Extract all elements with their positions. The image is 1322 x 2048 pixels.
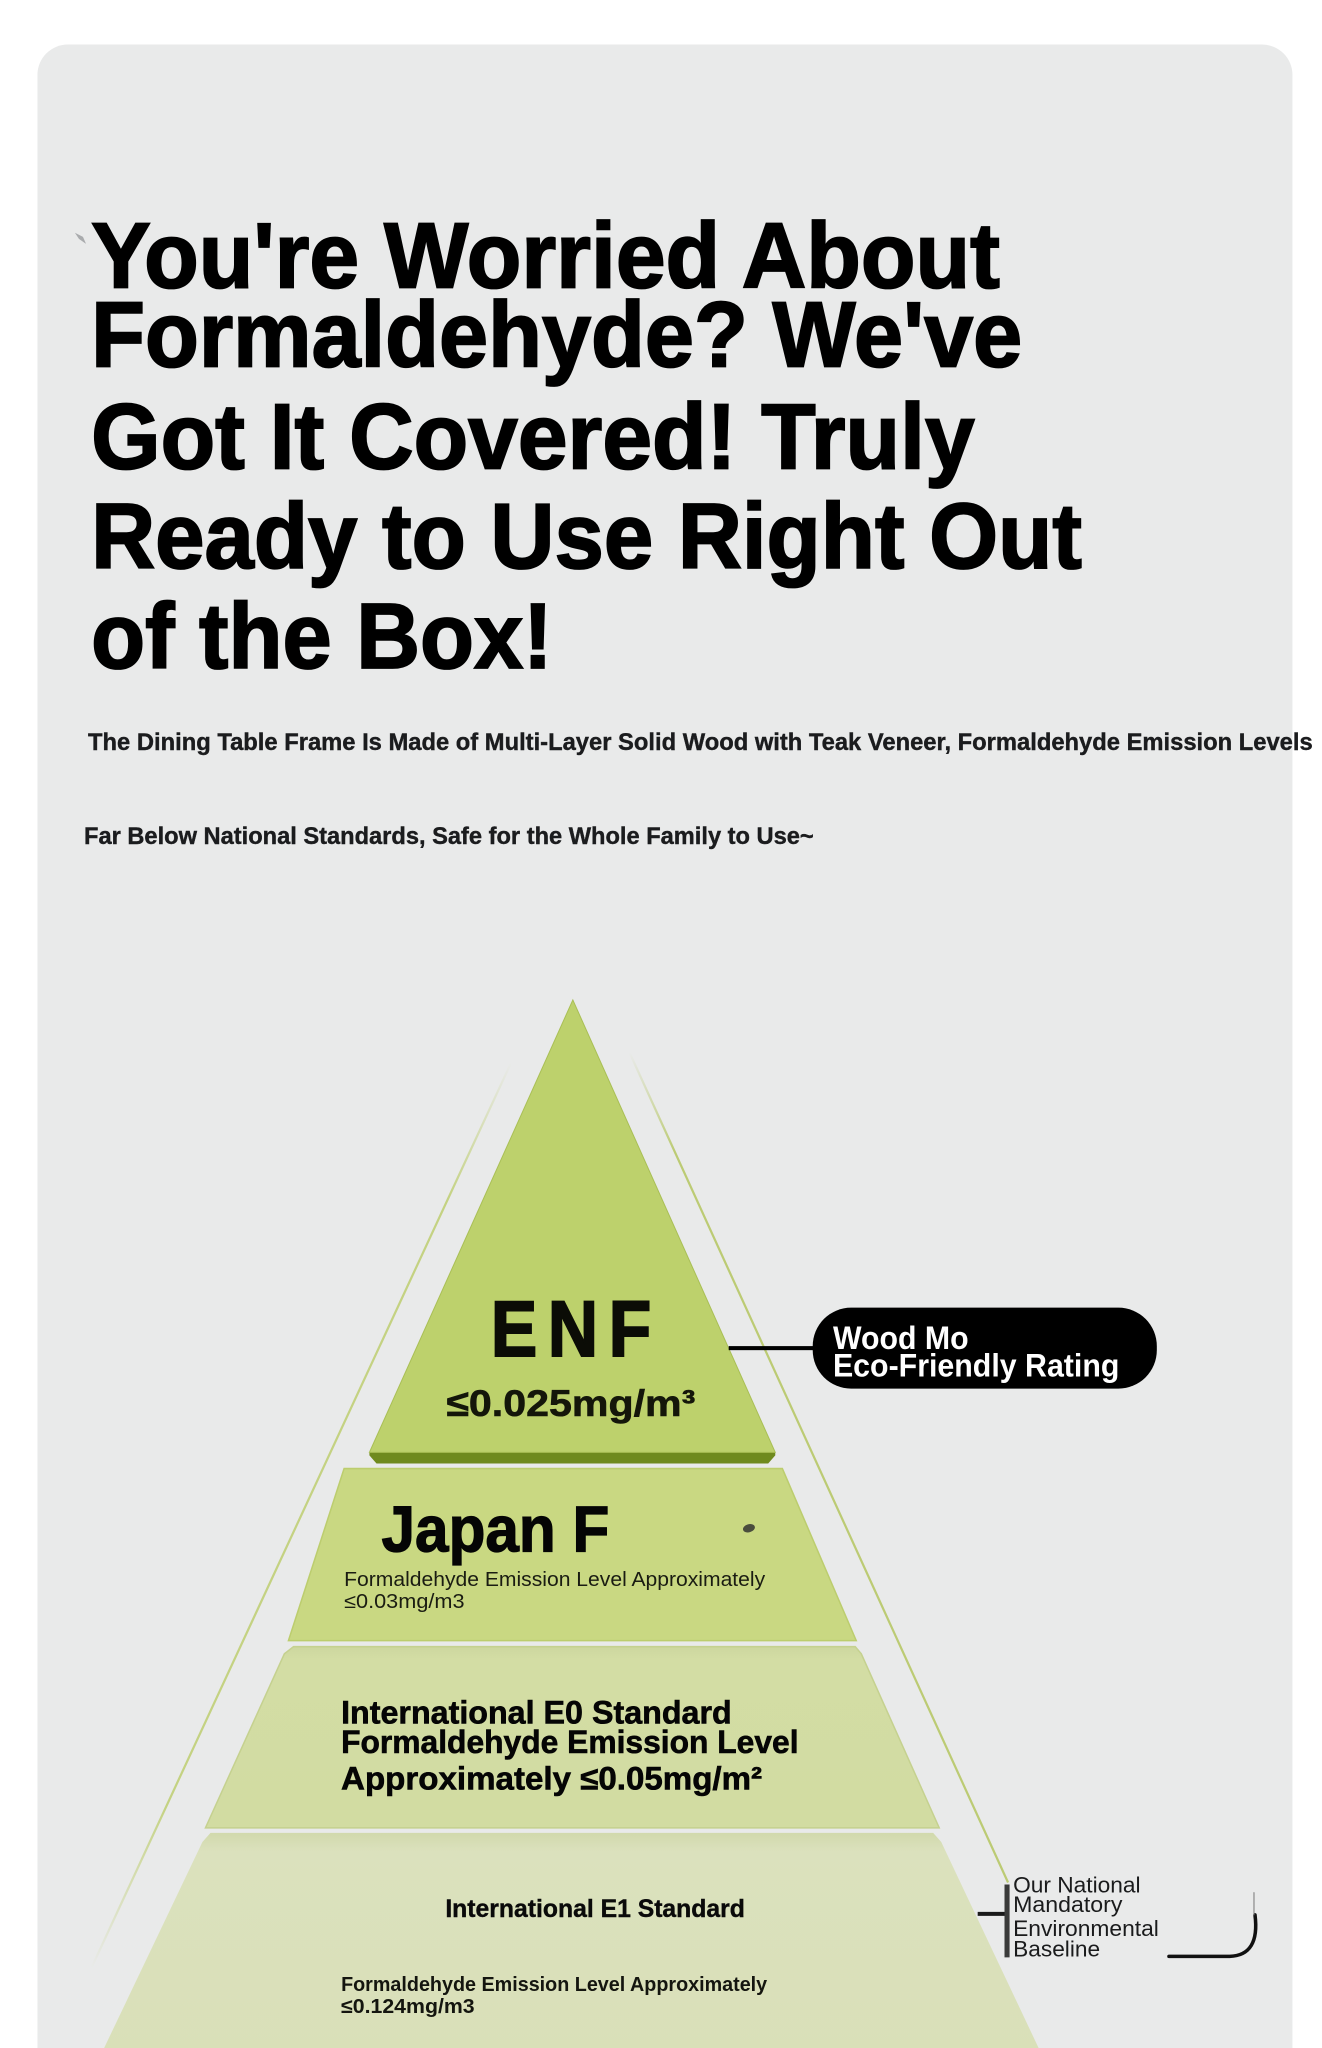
E1 detail (341, 1974, 768, 2018)
Japan F detail: ≤0.03mg/m3 (344, 1591, 465, 1613)
pyramid tier: ENF (369, 1000, 775, 1464)
title: You're Worried About (91, 203, 1000, 307)
callout text: national baseline: Our National (1013, 1873, 1141, 1898)
pyramid tier: Japan F (288, 1469, 856, 1641)
E0 text: International E0 Standard (341, 1695, 732, 1731)
E0 text: Approximately ≤0.05mg/m² (341, 1760, 762, 1796)
ENF value: ≤0.025mg/m³ (446, 1382, 695, 1424)
outer pyramid outline (91, 1053, 1008, 1969)
decorative hook curve (1169, 1893, 1256, 1956)
title: Got It Covered! Truly (91, 385, 975, 489)
connector: ENF to rating pill (729, 1346, 815, 1350)
callout text: national baseline: Baseline (1013, 1936, 1100, 1961)
subtitle text (84, 729, 1313, 850)
title: Ready to Use Right Out (91, 484, 1082, 588)
E1 heading: International E1 Standard (445, 1895, 745, 1923)
subtitle text: Far Below National Standards, Safe for the Whole Family to Use~ (84, 823, 814, 850)
callout text: national baseline (1013, 1873, 1159, 1961)
icon: small dark speck (742, 1523, 756, 1534)
E0 text: Formaldehyde Emission Level (341, 1724, 799, 1760)
E1 detail: ≤0.124mg/m3 (341, 1996, 475, 2018)
pyramid tier: International E0 (205, 1647, 939, 1828)
callout: national baseline bracket (978, 1885, 1007, 1957)
ENF label: ENF (491, 1285, 651, 1373)
title: of the Box! (91, 584, 553, 688)
callout: Wood Mo rating pill: Eco-Friendly Rating (833, 1347, 1119, 1383)
icon: small stray mark (75, 233, 86, 244)
title (91, 203, 1082, 688)
Japan F heading: Japan F (382, 1493, 609, 1566)
title: Formaldehyde? We've (91, 282, 1022, 386)
callout text: national baseline: Environmental (1013, 1916, 1159, 1941)
subtitle text: The Dining Table Frame Is Made of Multi-Layer Solid Wood with Teak Veneer, Formaldehyde Emission Levels (88, 729, 1313, 756)
callout: Wood Mo rating pill (813, 1308, 1157, 1389)
E1 detail: Formaldehyde Emission Level Approximately (341, 1974, 768, 1996)
E0 text (341, 1695, 799, 1796)
Japan F detail (344, 1569, 766, 1613)
Japan F detail: Formaldehyde Emission Level Approximately (344, 1569, 766, 1591)
pyramid tier: International E1 (96, 1833, 1047, 2048)
callout: Wood Mo rating pill: Wood Mo (833, 1320, 969, 1356)
callout text: national baseline: Mandatory (1013, 1892, 1123, 1917)
